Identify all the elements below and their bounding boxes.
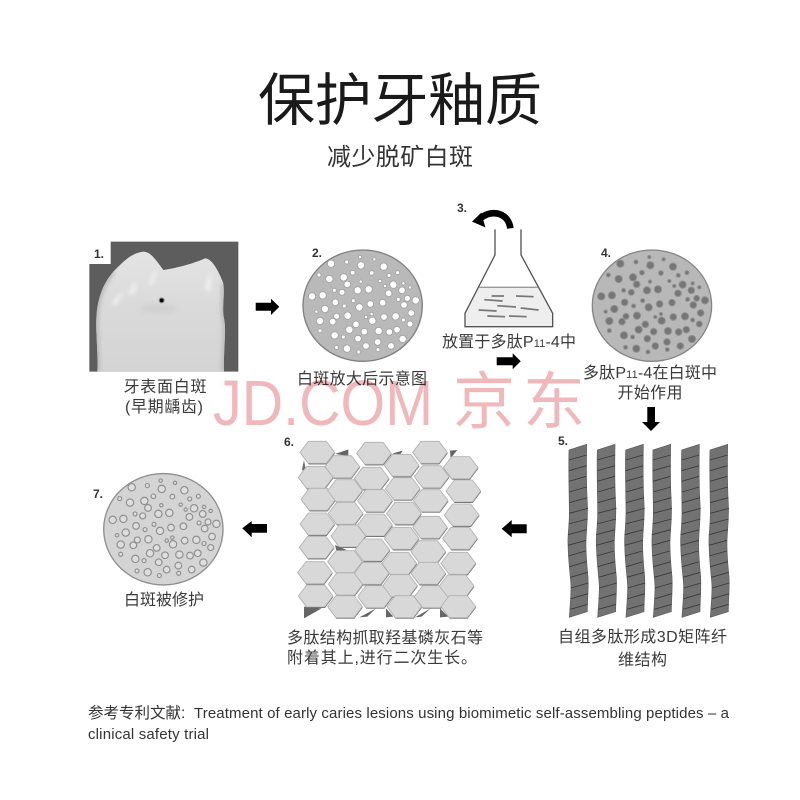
step number 3: 3. (457, 201, 467, 215)
watermark JD.COM: JD.COM (213, 367, 433, 439)
caption 7: 白斑被修护 (124, 591, 204, 609)
self-assembled fiber matrix (568, 444, 729, 617)
tooth photo (89, 242, 238, 372)
panel: step 4 peptide in spot (583, 246, 717, 402)
title: 保护牙釉质 (258, 69, 542, 133)
caption 3: 放置于多肽P11-4中 (442, 333, 576, 351)
caption 6: 多肽结构抓取羟基磷灰石等 (287, 629, 483, 647)
reference line 1 Chinese lead-in: 参考专利文献: (88, 704, 185, 722)
hydroxyapatite hexagon lattice (298, 441, 481, 619)
peptide filled circle (592, 250, 712, 361)
arrow: step 6 to 7 (242, 521, 267, 537)
panel: step 1 tooth (89, 242, 238, 416)
caption 4 second line: 开始作用 (618, 384, 682, 402)
arrow: step 3 to 4 (497, 353, 521, 369)
step number 7: 7. (93, 487, 103, 501)
caption 4: 多肽P11-4在白斑中 (583, 364, 717, 382)
watermark JD: 京东 (453, 368, 585, 437)
step number 1: 1. (94, 247, 104, 261)
step number 2: 2. (312, 246, 322, 260)
reference text (88, 704, 730, 743)
curved arrow above flask (472, 213, 510, 228)
caption 1 second line: (早期龋齿) (125, 398, 203, 416)
flask illustration (465, 229, 553, 327)
arrow: step 4 to 5 (642, 407, 660, 431)
magnified white spot circle (303, 250, 422, 361)
caption 2: 白斑放大后示意图 (297, 369, 427, 388)
caption 6 second line: 附着其上,进行二次生长。 (287, 649, 477, 667)
step number 5: 5. (558, 434, 568, 448)
caption 5 second line: 维结构 (618, 651, 667, 669)
panel: step 2 magnified spot (297, 246, 427, 388)
panel: step 3 flask (442, 201, 576, 351)
panel: step 6 hexagons (284, 435, 483, 667)
reference line 1 title: Treatment of early caries lesions using biomimetic self-assembling peptides – a (194, 705, 730, 722)
subtitle: 减少脱矿白斑 (327, 144, 473, 171)
step number 6: 6. (284, 435, 294, 449)
watermark (213, 367, 585, 439)
arrow: step 5 to 6 (502, 520, 527, 537)
panel: step 5 fibers (558, 434, 729, 669)
panel: step 7 repaired spot (93, 474, 223, 609)
repaired spot circle (104, 474, 223, 585)
step number 4: 4. (601, 246, 611, 260)
caption 1: 牙表面白斑 (124, 378, 206, 396)
caption 5: 自组多肽形成3D矩阵纤 (558, 628, 727, 646)
arrow: step 1 to 2 (256, 299, 279, 315)
reference line 2: clinical safety trial (88, 726, 209, 743)
